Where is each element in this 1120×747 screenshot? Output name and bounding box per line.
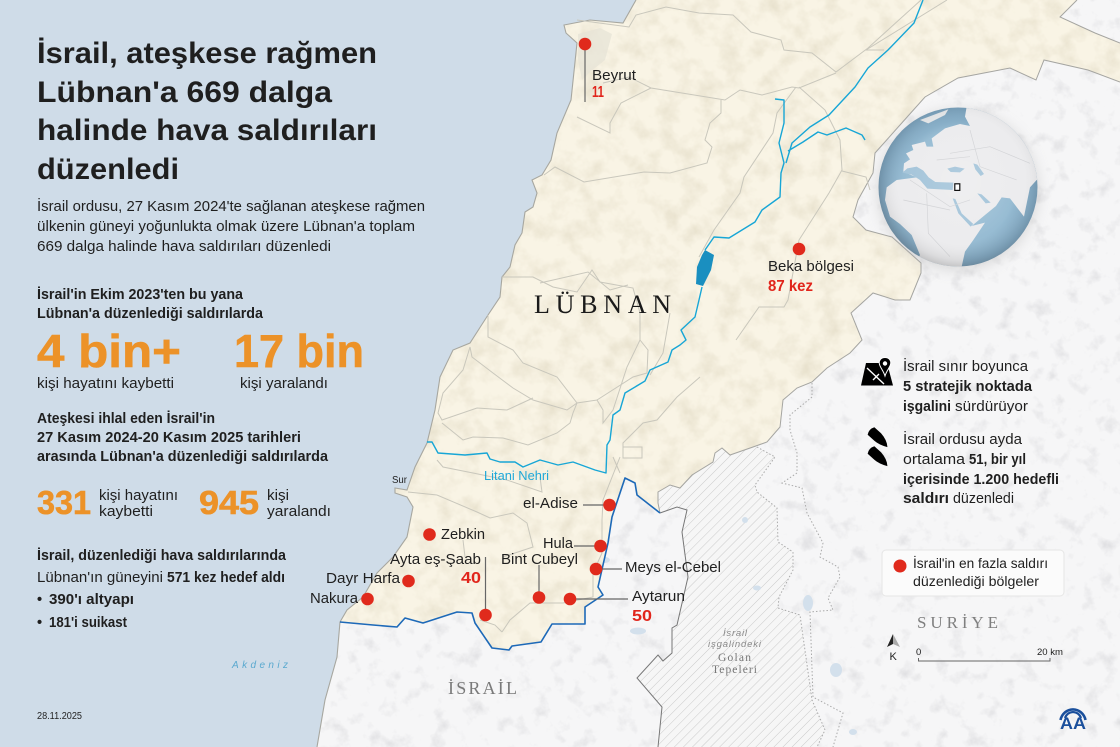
stat: 17 bin wounded: kişi yaralandı (240, 375, 328, 392)
scale bar: 0 (916, 647, 921, 658)
marker: el-Adise: el-Adise (523, 495, 578, 512)
Golan Heights occupied area (637, 447, 825, 747)
marker: Beyrut: Beyrut (592, 67, 637, 84)
logo: AA: AA (1060, 714, 1086, 733)
marker: Beyrut: 11 (592, 84, 604, 101)
continents (885, 107, 1050, 267)
ceasefire heading: arasında Lübnan'a düzenlediği saldırılarda (37, 449, 329, 465)
Golan and Israel boundary line (637, 507, 688, 747)
marker: Beyrut (579, 38, 637, 102)
Golan label: işgalindeki (708, 639, 762, 650)
marker: Beka bölgesi (768, 243, 854, 295)
stat: 17 bin wounded: 17 bin (234, 325, 364, 377)
note: monthly strikes: düzenledi (953, 490, 1014, 507)
Golan label: Golan (718, 652, 751, 664)
stats since ceasefire (37, 410, 331, 521)
Golan label: İsrail (723, 628, 748, 639)
targets text block: 390'ı altyapı (49, 592, 134, 608)
marker: Nakura: Nakura (310, 590, 359, 607)
country label: Lübnan: LÜBNAN (534, 290, 671, 319)
stat: 331 killed: kişi hayatını (99, 487, 178, 504)
legend (882, 550, 1064, 596)
note: monthly strikes: saldırı (903, 491, 949, 507)
stat: 945 wounded: kişi (267, 487, 289, 504)
blue line border (340, 478, 660, 650)
marker: Bint Cubeyl (501, 551, 578, 604)
intro paragraph: İsrail ordusu, 27 Kasım 2024'te sağlanan ateşkese rağmen (37, 197, 425, 215)
Beirut urban area (578, 28, 612, 80)
title: Lübnan'a 669 dalga (37, 76, 332, 109)
note: monthly strikes: 51, bir yıl (969, 452, 1026, 468)
Golan label (708, 628, 762, 676)
marker: Beka bölgesi: Beka bölgesi (768, 258, 854, 275)
intro paragraph (37, 197, 425, 255)
marker: el-Adise (523, 495, 616, 512)
stat: 945 wounded: 945 (199, 484, 259, 521)
marker: Aytarun (564, 588, 685, 625)
marker: Zebkin: Zebkin (441, 526, 485, 543)
legend: düzenlediği bölgeler (913, 574, 1040, 589)
marker: Aytarun: 50 (632, 608, 652, 625)
neighbouring land: Israel and Syria (300, 0, 1120, 747)
targets text block: 181'i suikast (49, 615, 127, 631)
title: düzenledi (37, 153, 179, 186)
stats heading: Lübnan'a düzenlediği saldırılarda (37, 306, 264, 322)
note: monthly strikes: içerisinde 1.200 hedefli (903, 472, 1059, 488)
globe sphere (878, 107, 1050, 267)
marker: Meys el-Cebel: Meys el-Cebel (625, 559, 721, 576)
icon: two munitions (867, 426, 891, 469)
Syria dotted boundaries (755, 383, 843, 747)
targets text block: İsrail, düzenlediği hava saldırılarında (37, 547, 287, 564)
ceasefire heading (37, 410, 329, 465)
ceasefire heading: Ateşkesi ihlal eden İsrail'in (37, 410, 215, 427)
oceans (878, 107, 1038, 267)
place label: Sur: Sur (392, 475, 408, 486)
Golan label: Tepeleri (712, 664, 757, 676)
date: 28.11.2025 (37, 711, 82, 722)
country label: Suriye: SURİYE (917, 613, 998, 632)
coastline (317, 0, 636, 747)
north arrow (887, 634, 900, 663)
note: 5 strategic points: İsrail sınır boyunca (903, 357, 1029, 375)
targets text block (37, 547, 287, 631)
marker: Beka bölgesi: 87 kez (768, 278, 813, 295)
Lebanon marker on globe (955, 184, 960, 190)
note: 5 strategic points (903, 357, 1033, 415)
note: monthly strikes: ortalama (903, 451, 966, 468)
intro paragraph: ülkenin güneyi yoğunlukta olmak üzere Lübnan'a toplam (37, 218, 415, 235)
ceasefire heading: 27 Kasım 2024-20 Kasım 2025 tarihleri (37, 430, 301, 446)
stat: 4 bin+ killed: 4 bin+ (37, 325, 181, 377)
marker: Aytarun: Aytarun (632, 588, 685, 605)
country label: İsrail: İSRAİL (448, 678, 517, 698)
globe locator (878, 107, 1050, 270)
north arrow: K (890, 651, 898, 663)
stats heading (37, 286, 264, 322)
note: monthly strikes: İsrail ordusu ayda (903, 430, 1023, 448)
targets text block: 571 kez hedef aldı (167, 570, 285, 586)
targets text block: • (37, 592, 42, 608)
title (37, 37, 377, 186)
scale bar (916, 647, 1063, 661)
scale bar: 20 km (1037, 647, 1063, 658)
icon: map with pin (861, 358, 893, 386)
note: monthly strikes (903, 430, 1059, 507)
marker: Bint Cubeyl: Bint Cubeyl (501, 551, 578, 568)
targets text block: Lübnan'ın güneyini (37, 569, 163, 586)
small lakes (600, 517, 857, 735)
sea label: Akdeniz: Akdeniz (231, 660, 288, 671)
Litani and Orontes rivers (427, 0, 923, 473)
title: halinde hava saldırıları (37, 114, 377, 147)
marker: Hula: Hula (543, 535, 574, 552)
marker: Ayta eş-Şaab (390, 551, 492, 621)
river label: Litani Nehri (484, 469, 549, 483)
marker: Dayr Harfa: Dayr Harfa (326, 570, 401, 587)
globe shadow (878, 110, 1038, 270)
title: İsrail, ateşkese rağmen (37, 37, 377, 70)
stat: 945 wounded: yaralandı (267, 503, 331, 520)
note: 5 strategic points: işgalini (903, 399, 951, 415)
map (300, 0, 1120, 747)
note: 5 strategic points: 5 stratejik noktada (903, 379, 1033, 395)
marker: Ayta eş-Şaab: 40 (461, 570, 481, 587)
Lebanon land (330, 0, 1120, 660)
sphere shading (878, 146, 1037, 266)
stats since October 2023 (37, 286, 364, 392)
Lebanon–Syria border line (658, 0, 1120, 513)
marker: Hula (543, 535, 607, 552)
legend: İsrail'in en fazla saldırı (913, 556, 1048, 571)
stat: 4 bin+ killed: kişi hayatını kaybetti (37, 375, 174, 392)
district boundaries (408, 0, 947, 632)
stat: 331 killed (37, 484, 178, 521)
Lake Qaraoun (696, 250, 714, 286)
stat: 331 killed: 331 (37, 484, 91, 521)
stat: 945 wounded (199, 484, 331, 521)
marker: Ayta eş-Şaab: Ayta eş-Şaab (390, 551, 481, 568)
note: 5 strategic points: sürdürüyor (955, 398, 1028, 415)
stat: 331 killed: kaybetti (99, 503, 153, 520)
stats heading: İsrail'in Ekim 2023'ten bu yana (37, 286, 244, 303)
targets text block: • (37, 615, 42, 631)
intro paragraph: 669 dalga halinde hava saldırıları düzenledi (37, 238, 331, 255)
